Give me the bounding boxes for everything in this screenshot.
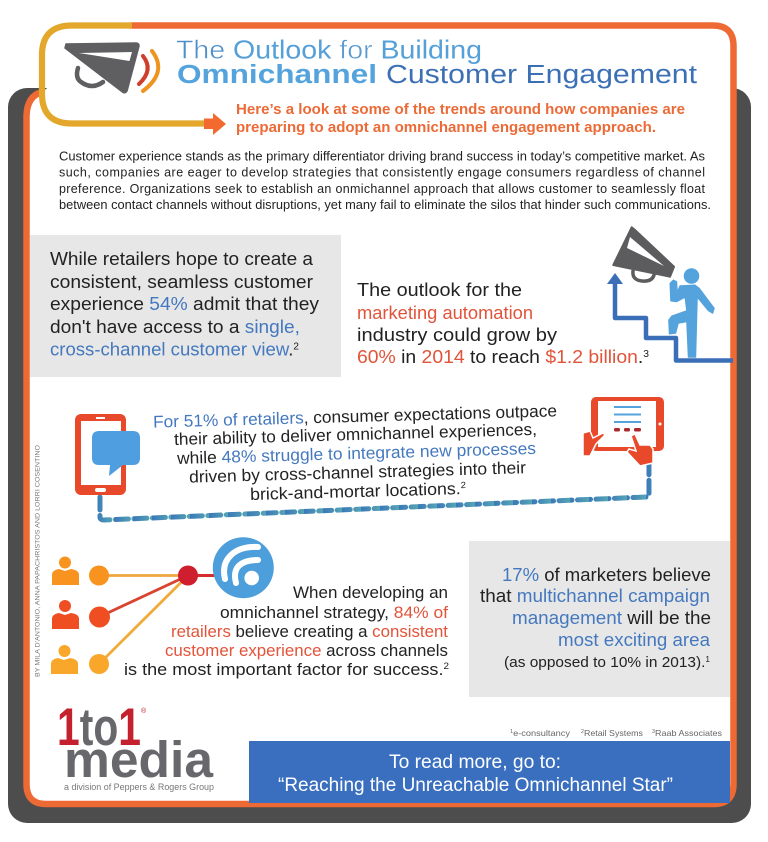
subtitle xyxy=(236,102,685,136)
subtitle: Here’s a look at some of the trends around how companies are xyxy=(236,102,685,118)
text block: 51% of retailers: their ability to deliver omnichannel experiences, xyxy=(174,420,537,449)
panel: 17% of marketers callout: 1 xyxy=(705,655,711,664)
subtitle: preparing to adopt an omnichannel engagement approach. xyxy=(236,120,656,136)
footnotes: Retail Systems xyxy=(584,728,643,738)
intro paragraph: preference. Organizations seek to establish an onmichannel approach that allows customer to seamlessly float xyxy=(59,182,706,196)
text block: 84% of retailers: customer experience across channels xyxy=(165,642,448,660)
icon: person climbing stairs toward megaphone xyxy=(607,227,733,360)
text block: marketing automation outlook: marketing automation xyxy=(357,302,533,323)
text block: 51% of retailers: driven by cross-channel strategies into their xyxy=(189,458,527,487)
text block: 51% of retailers: 2 xyxy=(460,480,466,490)
panel: 54% retailers callout: cross-channel customer view. xyxy=(50,338,293,360)
arrow: gold header bracket with orange arrowhead xyxy=(42,26,226,135)
title: Customer Engagement xyxy=(386,61,697,89)
byline: BY MILA D'ANTONIO, ANNA PAPACHRISTOS AND LORRI COSENTINO xyxy=(34,445,42,677)
icon: tablet with tapping hands xyxy=(583,397,664,466)
footnotes xyxy=(510,728,722,738)
intro paragraph: such, companies are eager to develop strategies that consistently engage consumers regardless of channel xyxy=(59,166,705,180)
panel: 54% retailers callout xyxy=(30,235,341,377)
text block: 51% of retailers xyxy=(153,401,557,504)
text block: 84% of retailers: 2 xyxy=(444,661,449,671)
chart: people network linked to wifi signal xyxy=(51,537,274,674)
panel: 54% retailers callout: experience 54% admit that they xyxy=(50,293,320,314)
panel: 17% of marketers callout: most exciting area xyxy=(558,630,711,650)
panel: read more call to action: “Reaching the Unreachable Omnichannel Star” xyxy=(278,775,673,796)
panel: 17% of marketers callout: that multichannel campaign xyxy=(480,586,710,606)
panel: read more call to action xyxy=(249,741,730,803)
panel: 17% of marketers callout: management will be the xyxy=(512,608,711,628)
text block: 84% of retailers xyxy=(124,584,449,679)
icon: person red xyxy=(52,600,79,629)
text block: 51% of retailers: while 48% struggle to integrate new processes xyxy=(176,439,536,468)
text block: 84% of retailers: When developing an xyxy=(293,584,448,602)
panel: read more call to action: To read more, go to: xyxy=(389,752,561,773)
icon: person yellow xyxy=(51,645,78,674)
arrow: dashed connector between phone and tablet xyxy=(100,463,649,520)
text block: marketing automation outlook xyxy=(357,279,649,367)
intro paragraph: Customer experience stands as the primary differentiator driving brand success in today’s competitive market. As xyxy=(59,150,705,164)
panel: 54% retailers callout: consistent, seamless customer xyxy=(50,271,313,292)
icon: smartphone with speech bubble xyxy=(75,414,140,495)
panel: 17% of marketers callout: (as opposed to 10% in 2013). xyxy=(504,654,700,671)
text block: 84% of retailers: retailers believe creating a consistent xyxy=(171,623,448,641)
footnotes: 2 xyxy=(581,729,584,735)
text block: 84% of retailers: is the most important factor for success. xyxy=(124,661,416,679)
panel: 54% retailers callout: 2 xyxy=(293,342,299,352)
title: Omnichannel xyxy=(177,61,377,89)
footnotes: e-consultancy xyxy=(513,728,571,738)
text block: 51% of retailers: For 51% of retailers, consumer expectations outpace xyxy=(153,401,557,432)
logo: 1to1 media xyxy=(57,698,214,792)
panel: 54% retailers callout: While retailers hope to create a xyxy=(50,248,314,269)
panel: 17% of marketers callout xyxy=(469,541,730,697)
logo: 1to1 media: 1to1 xyxy=(57,698,141,757)
footnotes: 3 xyxy=(652,729,655,735)
footnotes: 1 xyxy=(510,729,513,735)
logo: 1to1 media: media xyxy=(64,731,214,788)
intro paragraph xyxy=(59,150,711,212)
text block: marketing automation outlook: 60% in 2014 to reach $1.2 billion. xyxy=(357,346,643,367)
text block: 51% of retailers: brick-and-mortar locations. xyxy=(250,479,451,504)
icon: person orange xyxy=(52,556,79,585)
panel: 17% of marketers callout: 17% of marketers believe xyxy=(502,565,711,585)
title xyxy=(176,34,697,89)
footnotes: Raab Associates xyxy=(655,728,722,738)
icon: header megaphone xyxy=(65,43,158,93)
intro paragraph: between contact channels without disruptions, yet many fail to eliminate the silos that hinder such communications. xyxy=(59,198,711,212)
logo: 1to1 media: a division of Peppers & Rogers Group xyxy=(64,782,214,792)
text block: marketing automation outlook: 3 xyxy=(643,349,649,360)
text block: marketing automation outlook: The outlook for the xyxy=(357,279,522,300)
logo: 1to1 media: ® xyxy=(141,707,147,715)
text block: 84% of retailers: omnichannel strategy, 84% of xyxy=(220,604,448,622)
text block: marketing automation outlook: industry could grow by xyxy=(357,324,558,345)
panel: 54% retailers callout: don't have access to a single, xyxy=(50,316,300,337)
title: The Outlook for Building xyxy=(176,34,482,64)
